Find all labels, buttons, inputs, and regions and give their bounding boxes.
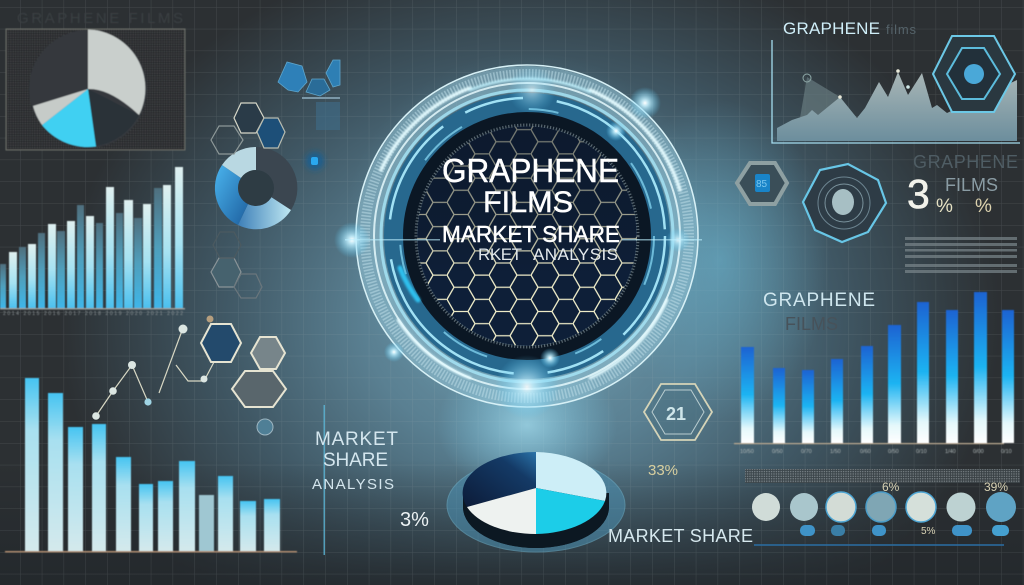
stat: films: FILMS <box>945 175 998 195</box>
bar axis labels: 0/70 <box>801 449 812 455</box>
bar axis labels: 0/10 <box>1001 449 1012 455</box>
stat: large 3: 3 <box>907 171 930 217</box>
icon: large ringed hexagon <box>803 164 886 242</box>
central ring emblem <box>334 51 712 421</box>
stat block: films percent <box>907 152 1018 217</box>
label: market share bottom: MARKET SHARE <box>608 526 753 546</box>
bubble percent labels: 5% <box>921 526 936 537</box>
inner hexagon lattice disc <box>417 126 637 346</box>
label: graphene lower right <box>763 290 875 334</box>
hexagon cluster: lower left <box>201 324 286 435</box>
icon: blue molecule cubes <box>278 60 340 170</box>
line chart with markers <box>92 316 214 420</box>
stat: percent two: % <box>975 196 992 217</box>
subtitle: analysis: ANALYSIS <box>533 245 618 264</box>
bar axis labels: 1/50 <box>830 449 841 455</box>
subtitle: rket fragment: RKET <box>478 245 522 264</box>
bubble row <box>745 469 1020 546</box>
percent value: 3% <box>400 509 429 531</box>
hexagon cluster: upper left of centre <box>211 103 285 298</box>
title <box>442 152 620 264</box>
icon: blue square hexagon: 85 <box>756 179 768 190</box>
tiny axis labels: 2014 2015 2016 2017 2018 2019 2020 2021 2022 <box>3 311 183 317</box>
bar axis labels: 1/40 <box>945 449 956 455</box>
stat block: films percent: GRAPHENE <box>913 152 1018 172</box>
icon: blue square hexagon <box>737 163 787 204</box>
3D pie chart: market share <box>447 452 625 552</box>
icon: top right hexagon with dot <box>933 36 1015 112</box>
bar chart: lower left <box>5 378 297 552</box>
label: graphene lower right: GRAPHENE <box>763 290 875 311</box>
glowing arcs <box>381 79 680 378</box>
bubble percent labels: 6% <box>882 480 900 494</box>
bar axis labels: 0/60 <box>860 449 871 455</box>
light flares <box>334 66 702 419</box>
donut chart <box>215 147 297 229</box>
pie chart <box>29 30 147 148</box>
bar chart: lower right <box>734 292 1014 455</box>
label: graphene top right: GRAPHENE <box>783 19 880 38</box>
bar axis labels: 0/00 <box>973 449 984 455</box>
faint pie heading: GRAPHENE FILMS <box>17 10 183 27</box>
stat: percent one: % <box>936 196 953 217</box>
text lines block <box>905 237 1017 273</box>
bubble percent labels: 39% <box>984 480 1008 494</box>
bar axis labels <box>740 449 1012 455</box>
bar axis labels: 10/50 <box>740 449 754 455</box>
label: graphene lower right: FILMS <box>785 314 838 334</box>
bar axis labels: 0/50 <box>888 449 899 455</box>
title line: films: FILMS <box>483 186 573 219</box>
bar axis labels: 0/10 <box>916 449 927 455</box>
label: market share analysis <box>312 405 429 555</box>
subtitle: market share: MARKET SHARE <box>442 221 620 247</box>
bar chart: top-left <box>0 167 185 317</box>
label: market share analysis: MARKET <box>315 429 398 450</box>
bubble percent labels <box>882 480 1008 537</box>
label line: analysis: ANALYSIS <box>312 476 394 493</box>
icon: small hexagon badge <box>644 384 712 440</box>
label: graphene top right: films <box>886 22 916 37</box>
icon: small hexagon badge: 21 <box>666 404 686 424</box>
bar axis labels: 0/50 <box>772 449 783 455</box>
area chart: top right <box>772 40 1020 143</box>
percent label: 33%: 33% <box>648 462 678 479</box>
title: GRAPHENE <box>442 152 619 189</box>
panel: top-left pie chart <box>6 10 185 150</box>
label line: share: SHARE <box>323 450 388 471</box>
